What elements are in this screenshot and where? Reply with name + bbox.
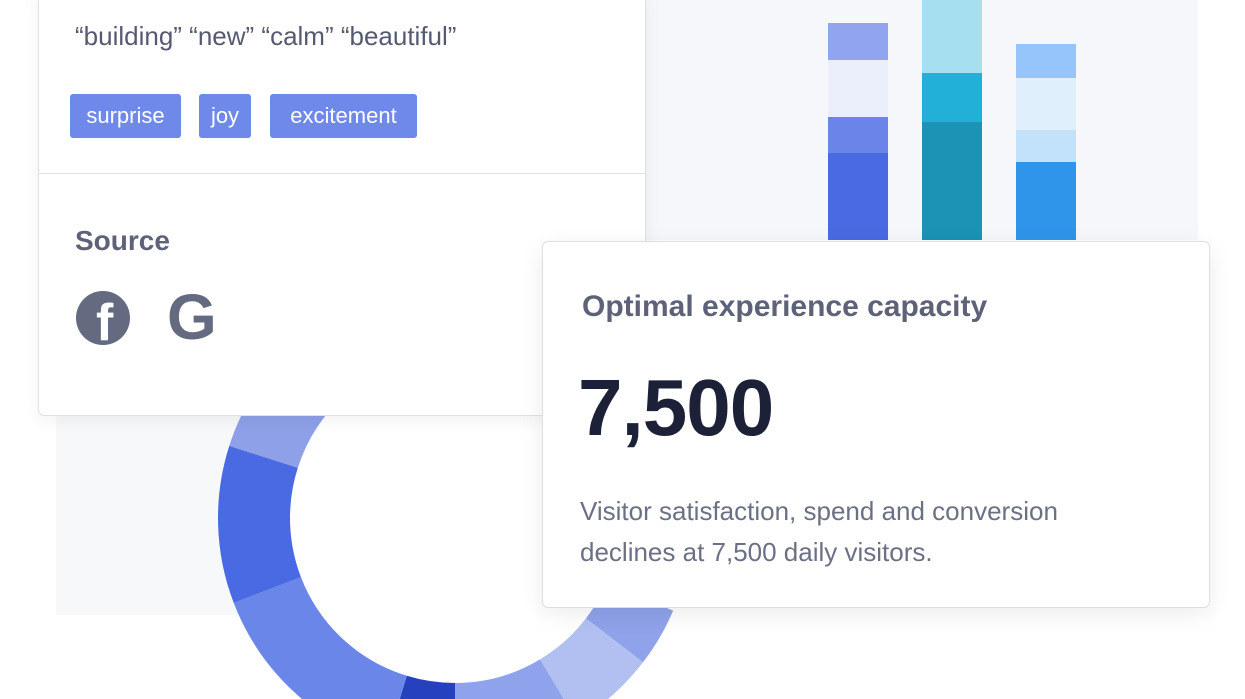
tags: joy [211,103,239,128]
icon: facebook [76,291,130,345]
description [580,496,1058,567]
panel: keywords and source card [38,0,646,416]
background panel: donut [56,400,556,615]
background panel: bars [645,0,1198,240]
description: Visitor satisfaction, spend and conversion [580,496,1058,526]
keywords text: “building” “new” “calm” “beautiful” [75,21,456,51]
stacked bar chart [828,0,1076,240]
source heading: Source [75,225,170,256]
tags: excitement [290,103,397,128]
description: declines at 7,500 daily visitors. [580,537,933,567]
panel: optimal experience capacity [542,241,1210,608]
card title: Optimal experience capacity [582,290,987,323]
tags [70,94,417,138]
icon: google: G [167,281,217,353]
big number: 7,500 [578,363,773,452]
tags: surprise [86,103,165,128]
